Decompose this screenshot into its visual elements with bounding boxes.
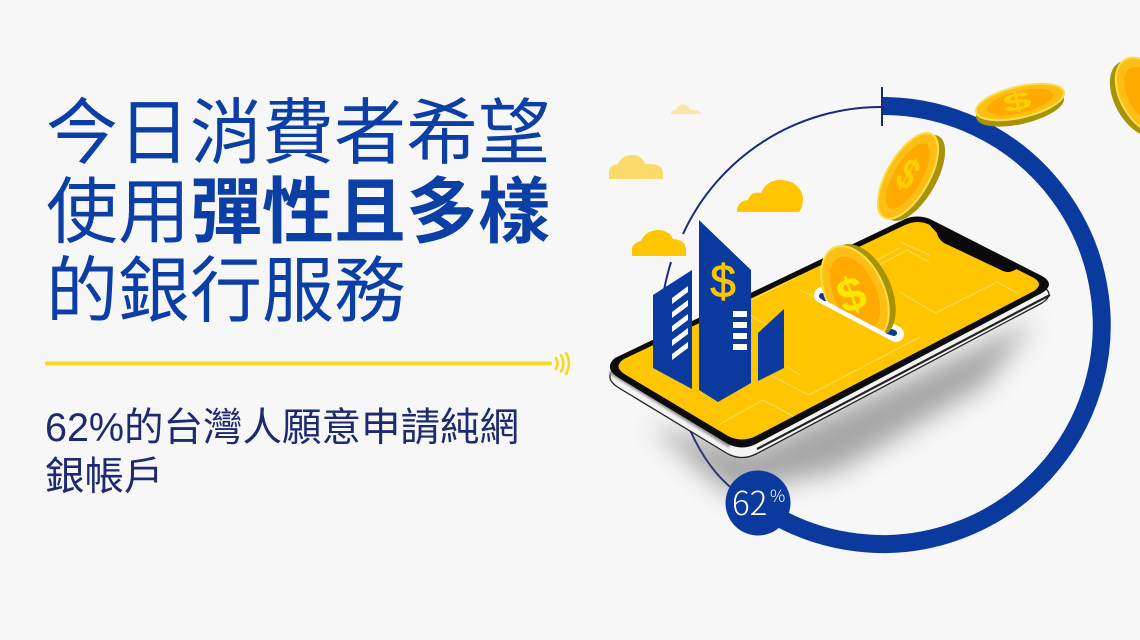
- cloud: lower left: [632, 230, 686, 256]
- left tower windows: [672, 286, 688, 360]
- subtitle text: [45, 406, 519, 499]
- cloud: middle: [737, 180, 803, 212]
- coin: falling middle: [866, 124, 957, 230]
- percentage badge: 62: [732, 477, 767, 525]
- coin: falling middle: $: [888, 150, 927, 200]
- title: 今日消費者希望: [46, 94, 550, 174]
- title: 的銀行服務: [46, 252, 406, 332]
- phone body: [610, 226, 1049, 458]
- coin in slot: [820, 244, 896, 334]
- percentage badge: [726, 470, 790, 536]
- coin: flat top: [973, 77, 1067, 134]
- subtitle text: 62%的台灣人願意申請純網: [45, 406, 519, 450]
- phone rim: [610, 216, 1049, 448]
- cloud: pale: [671, 105, 701, 114]
- coin slot: [822, 295, 896, 334]
- phone notch: [925, 220, 1040, 279]
- building: centre tower: [699, 220, 751, 402]
- phone shadow: [650, 320, 1035, 495]
- progress ring: [664, 87, 1102, 544]
- percentage badge: %: [770, 482, 785, 507]
- centre tower windows: [733, 311, 747, 350]
- phone: [610, 216, 1050, 458]
- cloud: upper left: [609, 155, 663, 179]
- phone silver shading: [610, 372, 730, 446]
- title: [46, 94, 550, 332]
- coin: cut off right: [1097, 47, 1140, 148]
- building: right wing: [758, 309, 784, 381]
- coin: flat top: $: [1000, 85, 1035, 119]
- subtitle text: 銀帳戶: [45, 455, 164, 499]
- coin in slot: $: [830, 266, 874, 325]
- screen grid: [718, 242, 1018, 425]
- building dollar sign: $: [710, 255, 736, 307]
- title: 使用彈性且多樣: [46, 173, 550, 253]
- building: [653, 220, 784, 402]
- divider line with signal icon: [47, 353, 569, 374]
- phone screen: [618, 222, 1039, 440]
- building: left tower: [653, 270, 692, 389]
- phone edge stripes: [757, 295, 1050, 449]
